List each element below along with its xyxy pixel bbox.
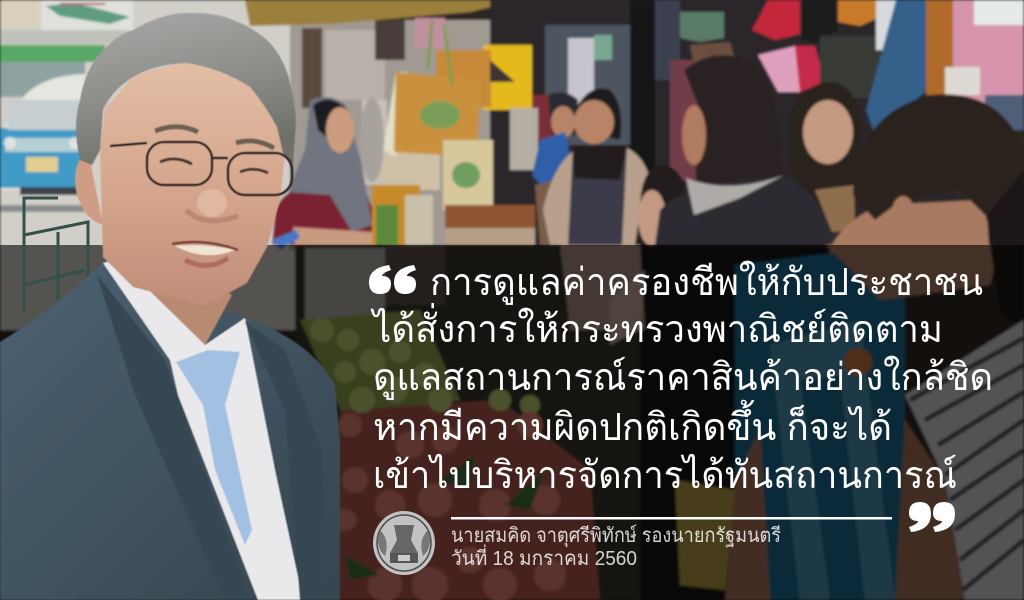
eyes <box>160 159 192 164</box>
glasses <box>110 142 292 195</box>
quote line 5: เข้าไปบริหารจัดการได้ทันสถานการณ์ <box>373 454 957 497</box>
stall canopy and left stall interior <box>245 0 537 250</box>
attribution divider <box>451 517 892 520</box>
icon: closing quote <box>909 502 955 532</box>
dark text band overlay <box>0 245 1024 600</box>
jacket lapel shadow <box>97 275 250 600</box>
man in foreground <box>0 13 340 600</box>
white shirt collar <box>103 258 303 600</box>
quote line 1: การดูแลค่าครองชีพให้กับประชาชน <box>430 261 983 305</box>
shoppers' lower bodies <box>560 245 1024 600</box>
nose <box>186 210 238 221</box>
icon: opening quote <box>369 265 416 294</box>
speaker name and title: นายสมคิด จาตุศรีพิทักษ์ รองนายกรัฐมนตรี <box>451 524 781 548</box>
blue tie <box>176 350 252 545</box>
attribution text <box>451 524 781 570</box>
icon: government seal <box>373 511 435 575</box>
metal chair <box>24 198 88 312</box>
boy in foreground <box>826 94 1024 262</box>
hair <box>76 13 296 165</box>
suit jacket <box>0 262 340 600</box>
main quote text <box>369 261 993 497</box>
quote line 3: ดูแลสถานการณ์ราคาสินค้าอย่างใกล้ชิด <box>373 356 993 400</box>
ear <box>75 150 103 225</box>
fruit stand <box>295 245 640 600</box>
smile <box>175 245 235 255</box>
quote line 4: หากมีความผิดปกติเกิดขึ้น ก็จะได้ <box>373 399 892 449</box>
street scene <box>0 0 310 330</box>
pink wall <box>945 0 1024 130</box>
neck <box>105 210 232 345</box>
eyebrows <box>155 127 198 132</box>
face <box>100 60 285 306</box>
hanging shopping bags and signs <box>360 20 532 210</box>
quote line 2: ได้สั่งการให้กระทรวงพาณิชย์ติดตาม <box>370 303 943 351</box>
market produce crates <box>372 185 535 245</box>
woman in headscarf <box>272 97 375 250</box>
centre clothes stall <box>490 0 955 250</box>
date: วันที่ 18 มกราคม 2560 <box>451 544 637 570</box>
shoppers <box>510 55 862 246</box>
